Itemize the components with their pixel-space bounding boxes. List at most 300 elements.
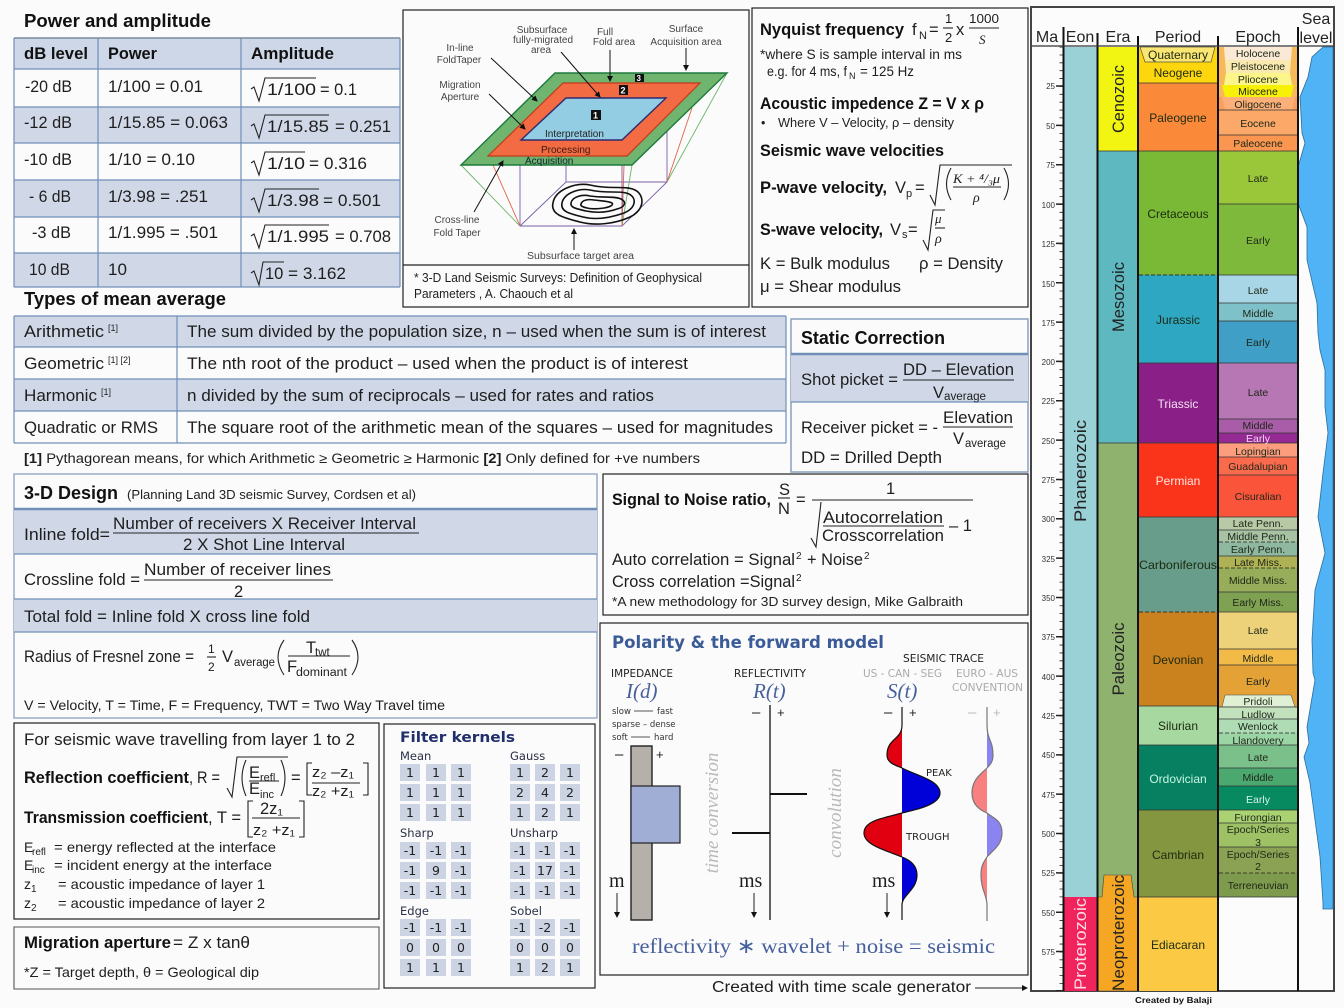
row 10 dB: = 3.162 [288, 265, 346, 283]
row -6 dB [29, 188, 381, 212]
diagram labels: area [531, 45, 551, 56]
reflectivity column [732, 668, 807, 920]
kernel: unsharp: -1 [514, 863, 526, 878]
kernel: unsharp [510, 826, 580, 899]
epoch column: Middle [1243, 420, 1274, 432]
signal to noise formula [612, 480, 973, 547]
heading: types of mean average: Types of mean average [24, 289, 226, 309]
kernel: sobel: 1 [566, 960, 574, 975]
fresnel zone formula: 1 [208, 642, 215, 656]
reflectivity column: ms [739, 870, 763, 892]
seismic trace: us convention: US - CAN - SEG [863, 668, 942, 680]
number markers: 3 [636, 74, 642, 83]
signal to noise formula: N [778, 500, 790, 518]
credit: created by balaji: Created by Balaji [1135, 995, 1212, 1005]
Ma axis labels: 275 [1042, 476, 1056, 485]
epoch column: Furongian [1234, 812, 1282, 824]
kernel: edge: -1 [404, 920, 416, 935]
s-wave formula: S-wave velocity, [760, 221, 883, 239]
diagram labels: Interpretation [545, 129, 604, 140]
eon column: Proterozoic [1071, 897, 1090, 990]
row -12 dB: 1/15.85 [267, 118, 329, 136]
epoch column [1219, 47, 1298, 897]
fresnel zone formula: dominant [296, 667, 348, 679]
row -20 dB: = 0.1 [320, 81, 357, 99]
eon column: Phanerozoic [1071, 419, 1090, 522]
period column: Ordovician [1149, 772, 1207, 786]
row -6 dB: 1/3.98 = .251 [108, 188, 208, 206]
signal to noise formula: S [779, 481, 790, 499]
period column: Silurian [1158, 719, 1198, 733]
kernel: sharp: -1 [455, 863, 467, 878]
panel: geologic time scale [1031, 7, 1334, 991]
reflection coefficient formula: z₂ –z₁ [312, 764, 354, 781]
citation: *A new methodology for 3D survey design, Mike Galbraith [612, 595, 963, 609]
impedance column: m [609, 870, 625, 892]
kernel: edge: 1 [432, 960, 440, 975]
inline fold formula [24, 515, 419, 554]
era column: Mesozoic [1109, 262, 1128, 332]
row: quadratic or RMS: The square root of the arithmetic mean of the squares – used for magnitudes [187, 419, 773, 437]
transmission coefficient formula [24, 800, 304, 839]
kernel: sobel: Sobel [510, 904, 542, 918]
column headers: level [1300, 30, 1332, 47]
epoch column: Guadalupian [1228, 461, 1288, 473]
fresnel zone formula: Radius of Fresnel zone = [24, 648, 194, 666]
epoch column: Middle Penn. [1227, 531, 1289, 543]
kernel: unsharp: -1 [514, 843, 526, 858]
s-wave formula: s [902, 229, 908, 241]
impedance column: IMPEDANCE [611, 668, 673, 680]
column headers: Sea [1302, 11, 1330, 28]
number markers: 1 [593, 110, 598, 120]
nyquist note: *where S is sample interval in ms [760, 47, 962, 62]
coefficient symbol definitions [24, 839, 276, 914]
diagram labels: Subsurface [517, 25, 568, 36]
period column [1139, 47, 1218, 991]
epoch column: Llandovery [1232, 735, 1284, 747]
column separators [1064, 27, 1298, 991]
velocity symbol definitions: K = Bulk modulus [760, 255, 890, 273]
table header: Amplitude [251, 45, 334, 63]
epoch column: Early [1246, 337, 1271, 349]
migration aperture formula: Migration aperture [24, 934, 171, 952]
seismic trace: euro convention: + [993, 705, 1001, 720]
migration aperture formula: = Z x tanθ [173, 934, 250, 952]
period column: Jurassic [1156, 313, 1200, 327]
kernel: gauss: 1 [516, 765, 524, 780]
seismic trace: us convention: ms [872, 870, 896, 892]
table header [24, 45, 334, 63]
Ma axis labels: 75 [1046, 161, 1056, 170]
s-wave formula: = [908, 221, 918, 239]
reflectivity column: REFLECTIVITY [734, 668, 807, 680]
row: arithmetic: The sum divided by the population size, n – used when the sum is of interest [187, 323, 766, 341]
p-wave formula: ρ [972, 191, 980, 206]
row 10 dB [29, 261, 346, 285]
velocity symbol definitions: μ = Shear modulus [760, 278, 901, 296]
nyquist note: e.g. for 4 ms, f [767, 64, 847, 79]
Ma axis labels [1042, 82, 1056, 957]
row -10 dB: 1/10 [267, 155, 305, 173]
fresnel zone formula [24, 639, 358, 679]
kernel: sobel: 2 [541, 960, 549, 975]
row -3 dB: 1/1.995 [267, 228, 329, 246]
epoch column: Late Miss. [1234, 557, 1282, 569]
migration aperture formula [24, 934, 250, 952]
crossline fold formula: Crossline fold = [24, 571, 140, 589]
panel: nyquist and velocities [752, 8, 1028, 307]
epoch column: 2 [1255, 861, 1261, 873]
shot picket formula: average [944, 391, 986, 403]
kernel: mean: 1 [457, 765, 465, 780]
signal to noise formula: Crosscorrelation [822, 527, 944, 545]
row -20 dB: 1/100 [267, 81, 316, 99]
era column [1098, 47, 1138, 991]
acquisition area [461, 73, 727, 165]
transmission coefficient formula: , T = [208, 809, 241, 827]
epoch column: Late [1248, 173, 1268, 185]
transmission coefficient formula: z₂ +z₁ [253, 822, 295, 839]
epoch column: Paleocene [1233, 138, 1283, 150]
epoch column: Late [1248, 387, 1268, 399]
panel: reflection and transmission coefficients [14, 723, 379, 919]
kernel: gauss: 1 [566, 765, 574, 780]
seismic trace: us convention: – [884, 704, 893, 721]
epoch column: Miocene [1238, 86, 1278, 98]
crossline fold formula: 2 [234, 583, 243, 601]
reflection coefficient formula: E [249, 764, 260, 782]
column headers [1036, 11, 1332, 47]
Ma axis labels: 175 [1042, 319, 1056, 328]
row -6 dB: 1/3.98 [267, 192, 319, 210]
nyquist formula: Nyquist frequency [760, 21, 905, 39]
row 10 dB: 10 dB [29, 261, 70, 279]
diagram labels: FoldTaper [437, 55, 482, 66]
impedance column: slow [612, 707, 631, 717]
kernel: mean: Mean [400, 749, 431, 763]
row -12 dB: -12 dB [24, 114, 72, 132]
kernel: gauss: Gauss [510, 749, 545, 763]
footnote: pythagorean means: [1] Pythagorean means, for which Arithmetic ≥ Geometric ≥ Harmonic [2] Only defined for +ve numbers [24, 451, 700, 466]
nyquist formula: 2 [945, 30, 952, 45]
period column: Neogene [1154, 66, 1203, 80]
Ma axis labels: 325 [1042, 555, 1056, 564]
nyquist formula: 1 [945, 11, 952, 26]
period column: Quaternary [1148, 48, 1208, 62]
cross correlation: Cross correlation =Signal [612, 573, 795, 591]
epoch column: Pliocene [1238, 74, 1278, 86]
diagram arrows [474, 48, 686, 250]
kernel: sharp: -1 [455, 883, 467, 898]
signal to noise formula: – 1 [949, 517, 972, 535]
row -20 dB [25, 78, 357, 101]
epoch column: Eocene [1240, 118, 1276, 130]
fresnel zone formula: average [234, 657, 275, 669]
receiver picket formula: Receiver picket = - [801, 419, 938, 437]
impedance column: soft [612, 733, 628, 743]
kernel: edge: 1 [406, 960, 414, 975]
diagram labels: Surface [669, 24, 704, 35]
coefficient symbol definitions: E [24, 857, 33, 873]
velocity symbol definitions: ρ = Density [919, 255, 1004, 273]
kernel: unsharp: -1 [564, 883, 576, 898]
coefficient symbol definitions: 2 [31, 903, 37, 914]
kernel: sobel: 0 [516, 940, 524, 955]
nyquist formula: S [979, 32, 986, 47]
total fold formula: Total fold = Inline fold X cross line fold [24, 608, 310, 626]
diagram caption: Parameters , A. Chaouch et al [414, 287, 573, 301]
eon column [1064, 47, 1097, 991]
signal to noise formula: Autocorrelation [823, 509, 943, 527]
p-wave formula: P-wave velocity, [760, 179, 887, 197]
kernel: sobel: 1 [516, 960, 524, 975]
header rule [1032, 45, 1334, 47]
Ma axis ticks [1060, 47, 1061, 991]
kernel: unsharp: -1 [514, 883, 526, 898]
epoch column: Early Penn. [1231, 544, 1285, 556]
kernel: mean: 1 [406, 765, 414, 780]
diagram labels: Aperture [441, 92, 480, 103]
seismic trace: euro convention [952, 668, 1023, 921]
row -6 dB: - 6 dB [29, 188, 71, 206]
kernel: mean: 1 [457, 785, 465, 800]
epoch column: Oligocene [1234, 99, 1282, 111]
panel: signal to noise [603, 474, 1028, 615]
row: geometric: Geometric [24, 355, 104, 373]
era column: Paleozoic [1109, 622, 1128, 696]
Ma axis labels: 300 [1042, 515, 1056, 524]
Ma axis labels: 475 [1042, 791, 1056, 800]
crossline fold formula [24, 561, 333, 601]
epoch column: Late [1248, 625, 1268, 637]
reflection coefficient formula: inc [260, 789, 275, 801]
epoch column: Pleistocene [1231, 61, 1285, 73]
kernel: gauss [510, 749, 580, 821]
kernel: edge: 0 [432, 940, 440, 955]
row -3 dB: -3 dB [32, 224, 71, 242]
seismic wave velocities heading: Seismic wave velocities [760, 142, 944, 160]
intro: For seismic wave travelling from layer 1 to 2 [24, 731, 355, 749]
reflection coefficient formula: z₂ +z₁ [312, 783, 354, 800]
kernel: sharp: -1 [404, 843, 416, 858]
epoch column: Cisuralian [1235, 491, 1282, 503]
coefficient symbol definitions: z [24, 876, 31, 892]
Ma axis labels: 150 [1042, 280, 1056, 289]
kernel: gauss: 4 [541, 785, 549, 800]
period column: Ediacaran [1151, 938, 1205, 952]
signal to noise formula: Signal to Noise ratio, [612, 491, 771, 509]
column headers: Eon [1066, 29, 1094, 46]
era column: Cenozoic [1109, 65, 1128, 133]
epoch column: Middle [1243, 772, 1274, 784]
panel: 3-D design [14, 474, 597, 718]
velocity symbol definitions [760, 255, 1004, 296]
heading: Filter kernels [400, 730, 515, 746]
row: arithmetic: Arithmetic [24, 323, 104, 341]
row: geometric: The nth root of the product – used when the product is of interest [187, 355, 688, 373]
variable definitions: V = Velocity, T = Time, F = Frequency, TWT = Two Way Travel time [24, 697, 445, 713]
column headers: Ma [1036, 29, 1058, 46]
epoch column: Epoch/Series [1227, 849, 1289, 861]
kernel: edge: 0 [406, 940, 414, 955]
nyquist note [760, 47, 962, 81]
period column: Cretaceous [1147, 207, 1209, 221]
seismic trace: us convention: PEAK [926, 768, 952, 779]
row -10 dB: 1/10 = 0.10 [108, 151, 195, 169]
heading [24, 483, 416, 503]
kernel: unsharp: Unsharp [510, 826, 558, 840]
diagram labels: Fold Taper [433, 228, 481, 239]
row -3 dB [32, 224, 391, 248]
epoch column: Lopingian [1235, 446, 1281, 458]
epoch column: Middle Miss. [1229, 575, 1287, 587]
coefficient symbol definitions: = incident energy at the interface [54, 857, 272, 873]
kernel: edge: 1 [457, 960, 465, 975]
number markers: 2 [620, 86, 626, 96]
shot picket formula: DD – Elevation [903, 361, 1014, 379]
heading: Static Correction [801, 328, 945, 348]
row -10 dB: -10 dB [24, 151, 72, 169]
nyquist note: = 125 Hz [860, 64, 914, 79]
acoustic impedence: Where V – Velocity, ρ – density [778, 115, 954, 130]
auto correlation [612, 551, 870, 569]
Ma axis labels: 450 [1042, 751, 1056, 760]
acoustic impedence: Acoustic impedence Z = V x ρ [760, 95, 984, 113]
column headers: Era [1106, 29, 1131, 46]
epoch column: Middle [1243, 308, 1274, 320]
kernel: sharp: 9 [432, 863, 440, 878]
diagram labels: Acquisition [525, 156, 573, 167]
interpretation area [521, 98, 666, 140]
inline fold formula: Number of receivers X Receiver Interval [113, 515, 416, 533]
shot picket formula [801, 361, 1014, 403]
kernel: mean: 1 [432, 785, 440, 800]
epoch column: Early [1246, 433, 1271, 445]
coefficient symbol definitions: = acoustic impedance of layer 1 [58, 876, 265, 892]
coefficient symbol definitions: inc [32, 865, 45, 876]
transmission coefficient formula: Transmission coefficient [24, 809, 208, 827]
row -3 dB: 1/1.995 = .501 [108, 224, 218, 242]
coefficient symbol definitions: 1 [31, 884, 37, 895]
row -3 dB: = 0.708 [335, 228, 391, 246]
kernel: sharp: Sharp [400, 826, 434, 840]
fresnel zone formula: F [287, 658, 297, 676]
period column: Devonian [1153, 653, 1203, 667]
diagram labels: Acquisition area [650, 37, 722, 48]
kernel: sharp: -1 [430, 843, 442, 858]
fresnel zone formula: V [222, 648, 233, 666]
transmission coefficient formula: 2z₁ [260, 800, 283, 818]
panel: polarity and the forward model [600, 623, 1028, 975]
row: harmonic: Harmonic [24, 387, 97, 405]
diagram labels: Fold area [593, 37, 636, 48]
table: types of mean average [14, 316, 786, 443]
kernel: sobel: 0 [541, 940, 549, 955]
row: geometric: [1] [2] [108, 355, 131, 365]
auto correlation: 2 [864, 551, 870, 562]
Ma axis labels: 400 [1042, 673, 1056, 682]
Ma axis labels: 125 [1042, 240, 1056, 249]
seismic trace: us convention: TROUGH [905, 832, 950, 843]
inline fold formula: Inline fold= [24, 526, 110, 544]
kernel: sharp: -1 [404, 863, 416, 878]
processing area [488, 83, 700, 156]
coefficient symbol definitions: refl [32, 847, 46, 858]
p-wave formula [760, 165, 1012, 206]
p-wave formula: p [906, 188, 912, 200]
epoch column: Ludlow [1241, 709, 1275, 721]
Ma axis labels: 425 [1042, 712, 1056, 721]
row -20 dB: 1/100 = 0.01 [108, 78, 203, 96]
aperture definitions: *Z = Target depth, θ = Geological dip [24, 964, 259, 980]
column headers: Epoch [1235, 29, 1281, 46]
table header: dB level [24, 45, 88, 63]
subsurface box lines [461, 73, 727, 226]
auto correlation: + Noise [807, 551, 863, 569]
diagram labels [433, 24, 722, 262]
Ma axis labels: 225 [1042, 397, 1056, 406]
epoch column: 3 [1255, 837, 1261, 849]
diagram labels: Full [597, 27, 613, 38]
nyquist formula: f [912, 21, 917, 39]
kernel: unsharp: -1 [564, 843, 576, 858]
period column: Carboniferous [1139, 558, 1217, 572]
impedance column: hard [654, 733, 673, 743]
epoch column: Epoch/Series [1227, 824, 1289, 836]
impedance column: + [656, 747, 664, 762]
Ma axis labels: 100 [1042, 201, 1056, 210]
table: power and amplitude [14, 38, 400, 287]
row -12 dB [24, 114, 391, 138]
kernel: edge: 0 [457, 940, 465, 955]
epoch column: Pridoli [1243, 696, 1273, 708]
epoch column: Late [1248, 285, 1268, 297]
period column: Triassic [1158, 397, 1198, 411]
kernel: sharp: -1 [455, 843, 467, 858]
epoch column: Early Miss. [1232, 597, 1284, 609]
kernel: sobel: -1 [564, 920, 576, 935]
sea level curve [1298, 47, 1333, 909]
row -12 dB: = 0.251 [335, 118, 391, 136]
acoustic impedence: • [761, 116, 765, 130]
epoch column: Terreneuvian [1228, 880, 1289, 892]
forward model equation: reflectivity ∗ wavelet + noise = seismic [632, 934, 995, 958]
nyquist note: N [849, 71, 856, 81]
kernel: gauss: 2 [566, 785, 574, 800]
epoch column: Late Penn. [1233, 518, 1283, 530]
reflection coefficient formula: = [291, 769, 301, 787]
reflection coefficient formula [24, 757, 368, 801]
reflection coefficient formula: , R = [189, 769, 220, 787]
coefficient symbol definitions: = energy reflected at the interface [54, 839, 276, 855]
convolution label: convolution [825, 768, 846, 858]
epoch column: Middle [1243, 653, 1274, 665]
signal to noise formula: = [796, 491, 806, 509]
receiver picket formula: V [953, 430, 964, 448]
kernel: mean: 1 [406, 785, 414, 800]
panel: filter kernels [384, 724, 595, 988]
diagram caption: * 3-D Land Seismic Surveys: Definition of Geophysical [414, 271, 702, 285]
reflection coefficient formula: E [249, 780, 260, 798]
row -12 dB: 1/15.85 = 0.063 [108, 114, 228, 132]
auto correlation: Auto correlation = Signal [612, 551, 795, 569]
receiver picket formula [801, 409, 1013, 450]
era column: Neoproterozoic [1109, 874, 1128, 991]
diagram labels: Migration [439, 80, 481, 91]
s-wave formula: V [890, 221, 901, 239]
kernel: mean [400, 749, 471, 821]
